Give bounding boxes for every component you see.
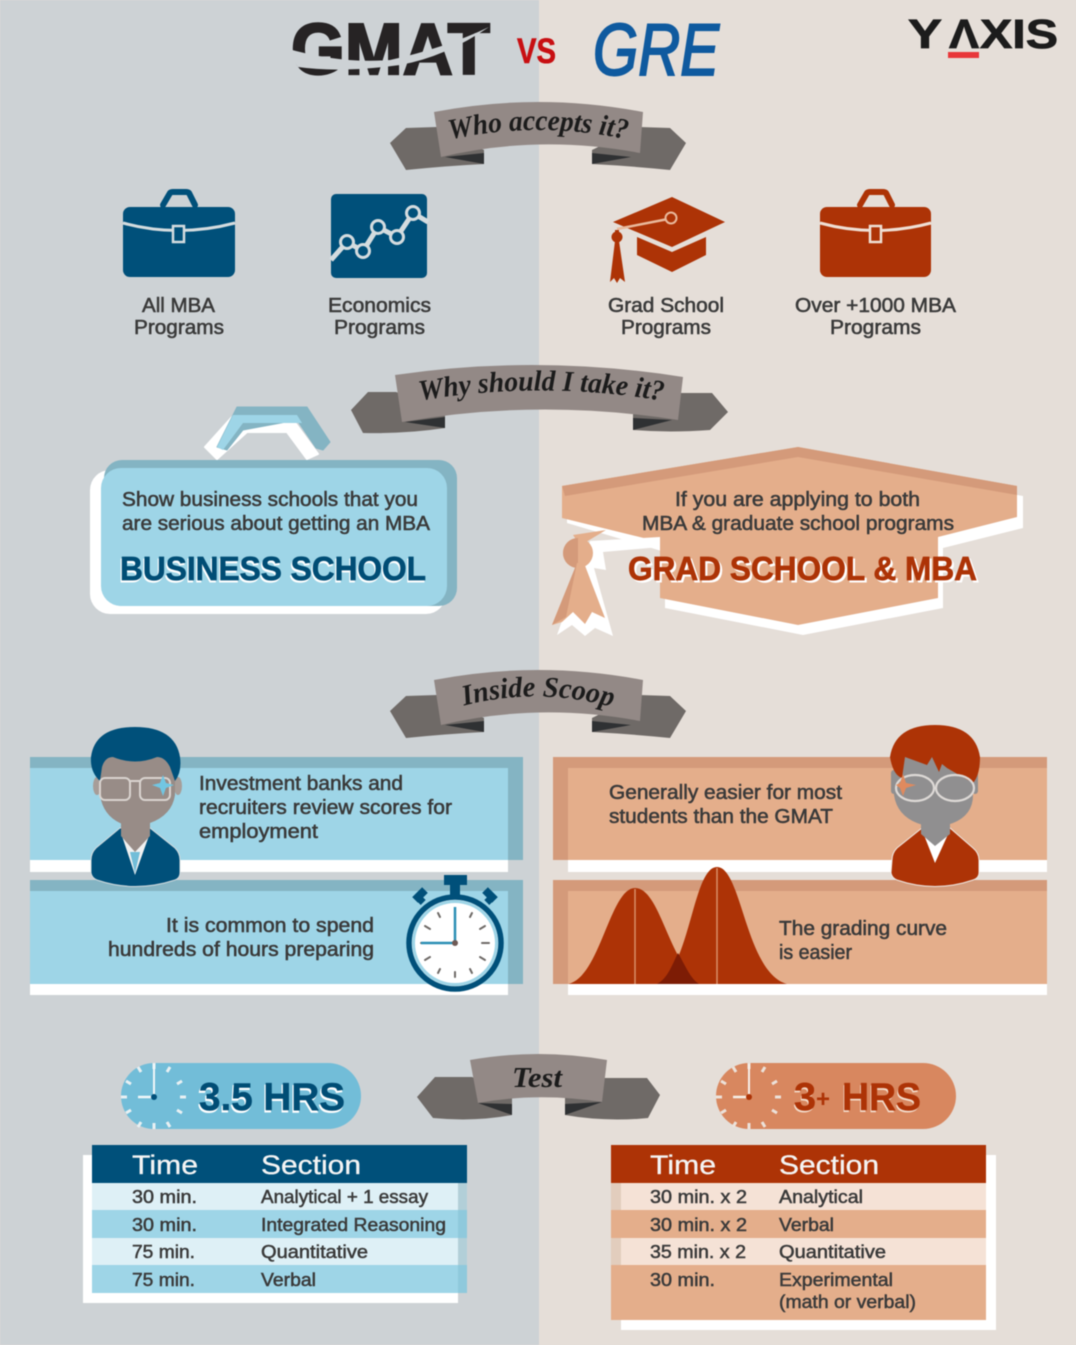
ribbon heading: Who accepts it? bbox=[390, 102, 686, 170]
text: 3+ HRS: 3 bbox=[793, 1078, 815, 1121]
table rows bbox=[650, 1187, 916, 1312]
label: All MBA Programs: Programs bbox=[134, 317, 224, 339]
label: Grad School Programs bbox=[608, 295, 724, 339]
panel: GMAT preparation bar bbox=[30, 880, 523, 995]
panel: grad school cap bbox=[552, 447, 1023, 636]
text: employment: employment bbox=[199, 821, 318, 843]
table rows: Quantitative bbox=[261, 1242, 368, 1262]
icon: clock ticks bbox=[121, 1063, 186, 1129]
icon: orange briefcase bbox=[820, 192, 931, 277]
table rows: 75 min. bbox=[132, 1270, 195, 1290]
chart: bell curves bbox=[568, 867, 787, 984]
label: Over +1000 MBA Programs: Over +1000 MBA bbox=[795, 295, 957, 317]
table header: Time bbox=[132, 1150, 198, 1180]
text: business school reason: are serious about getting an MBA bbox=[122, 513, 431, 535]
pill: 3.5 HRS bbox=[121, 1063, 361, 1129]
table rows: 75 min. bbox=[132, 1242, 195, 1262]
table rows: Experimental bbox=[779, 1270, 893, 1290]
icon: chart bbox=[331, 194, 428, 278]
table header: Section bbox=[779, 1150, 879, 1180]
panel: who accepts GMAT bbox=[123, 192, 431, 339]
text: grad school reason bbox=[642, 489, 954, 535]
cap tassel bbox=[552, 530, 660, 636]
panel: GRE grading bar bbox=[553, 880, 1047, 995]
table rows: (math or verbal) bbox=[779, 1292, 916, 1312]
cap body bbox=[562, 447, 1017, 625]
icon: blue briefcase bbox=[123, 192, 235, 277]
label: Economics Programs: Programs bbox=[334, 317, 425, 339]
ribbon heading: Who accepts it?: Who accepts it? bbox=[448, 114, 630, 140]
cap top band bbox=[562, 447, 1017, 496]
text: employment: Investment banks and bbox=[199, 773, 403, 795]
text: preparing: It is common to spend bbox=[166, 915, 374, 937]
logo: Y-Axis: Λ bbox=[949, 11, 980, 57]
text: 3+ HRS: HRS bbox=[842, 1076, 921, 1119]
title: GRE: GRE bbox=[593, 10, 720, 91]
text: grading curve: is easier bbox=[779, 942, 852, 964]
text: 3.5 HRS: 3.5 HRS bbox=[199, 1076, 345, 1119]
title bbox=[285, 10, 720, 91]
pill: 3+ HRS bbox=[716, 1063, 956, 1129]
text: easier bbox=[609, 782, 842, 828]
table: GRE sections bbox=[611, 1145, 996, 1330]
briefcase handle bbox=[205, 407, 330, 459]
logo: Y-Axis: Y bbox=[908, 11, 942, 57]
label: All MBA Programs: All MBA bbox=[142, 295, 216, 317]
ribbon heading: Why should I take it? bbox=[350, 364, 728, 434]
text: grading curve: The grading curve bbox=[779, 918, 947, 940]
icon: student bbox=[890, 725, 980, 886]
label: Over +1000 MBA Programs bbox=[795, 295, 957, 339]
text: grad school reason: If you are applying to both bbox=[675, 489, 920, 511]
table rows: Quantitative bbox=[779, 1242, 886, 1262]
text: 3+ HRS: + bbox=[816, 1086, 830, 1113]
text: 3+ HRS: 3 bbox=[794, 1076, 816, 1119]
text: easier: Generally easier for most bbox=[609, 782, 842, 804]
table header bbox=[132, 1150, 361, 1180]
table rows: Analytical bbox=[779, 1187, 863, 1207]
text: grading curve bbox=[779, 918, 947, 964]
table: GMAT sections bbox=[83, 1145, 467, 1303]
table rows: 35 min. x 2 bbox=[650, 1242, 746, 1262]
table rows: 30 min. bbox=[132, 1187, 197, 1207]
table rows bbox=[132, 1187, 446, 1290]
icon: stopwatch bbox=[409, 875, 501, 989]
text: preparing bbox=[108, 915, 374, 961]
text: business school reason: Show business schools that you bbox=[122, 489, 418, 511]
label: Economics Programs bbox=[328, 295, 431, 339]
title: GMAT: GMAT bbox=[291, 10, 490, 90]
briefcase body bbox=[90, 460, 457, 614]
ribbon heading: Inside Scoop bbox=[390, 670, 686, 738]
title: vs: VS bbox=[517, 32, 556, 71]
table rows: Analytical + 1 essay bbox=[261, 1187, 428, 1207]
heading: GRAD SCHOOL & MBA: GRAD SCHOOL & MBA bbox=[628, 550, 977, 587]
panel: who accepts GRE bbox=[608, 192, 957, 339]
ribbon heading: Why should I take it?: Why should I take it? bbox=[418, 370, 665, 402]
ribbon heading: Test: Test bbox=[512, 1062, 563, 1094]
text: business school reason bbox=[122, 489, 431, 535]
logo: Y-Axis: XIS bbox=[980, 11, 1058, 57]
text: preparing: hundreds of hours preparing bbox=[108, 939, 374, 961]
cap shadow bbox=[567, 457, 1023, 635]
text: 3+ HRS bbox=[793, 1076, 921, 1121]
text: 3+ HRS: HRS bbox=[841, 1078, 920, 1121]
text: grad school reason: MBA & graduate school programs bbox=[642, 513, 954, 535]
table header: Time bbox=[650, 1150, 716, 1180]
label: Grad School Programs: Grad School bbox=[608, 295, 724, 317]
label: Grad School Programs: Programs bbox=[621, 317, 711, 339]
text: employment: recruiters review scores for bbox=[199, 797, 452, 819]
label: All MBA Programs bbox=[134, 295, 224, 339]
panel: business school briefcase bbox=[90, 407, 457, 614]
table rows: 30 min. bbox=[650, 1270, 715, 1290]
panel: GMAT employment bar bbox=[30, 757, 523, 872]
text: employment bbox=[199, 773, 452, 843]
table rows: Verbal bbox=[779, 1215, 834, 1235]
heading: GRAD SCHOOL & MBA: GRAD SCHOOL & MBA bbox=[630, 552, 979, 589]
label: Economics Programs: Economics bbox=[328, 295, 431, 317]
icon: clock ticks bbox=[716, 1063, 781, 1129]
heading: BUSINESS SCHOOL: BUSINESS SCHOOL bbox=[119, 552, 425, 589]
icon: graduation cap bbox=[610, 197, 725, 283]
table header: Section bbox=[261, 1150, 361, 1180]
text: easier: students than the GMAT bbox=[609, 806, 833, 828]
table rows: Integrated Reasoning bbox=[261, 1215, 446, 1235]
table rows: 30 min. bbox=[132, 1215, 197, 1235]
logo: Y-Axis bbox=[908, 11, 1058, 58]
ribbon heading: Test bbox=[417, 1054, 660, 1119]
heading: BUSINESS SCHOOL: BUSINESS SCHOOL bbox=[120, 550, 426, 587]
text: 3.5 HRS: 3.5 HRS bbox=[198, 1078, 344, 1121]
ribbon heading: Inside Scoop: Inside Scoop bbox=[462, 676, 614, 712]
table rows: 30 min. x 2 bbox=[650, 1215, 747, 1235]
table rows: Verbal bbox=[261, 1270, 316, 1290]
icon: businessman bbox=[91, 727, 182, 886]
table rows: 30 min. x 2 bbox=[650, 1187, 747, 1207]
panel: GRE easier bar bbox=[553, 757, 1047, 872]
label: Over +1000 MBA Programs: Programs bbox=[830, 317, 921, 339]
table header bbox=[650, 1150, 879, 1180]
